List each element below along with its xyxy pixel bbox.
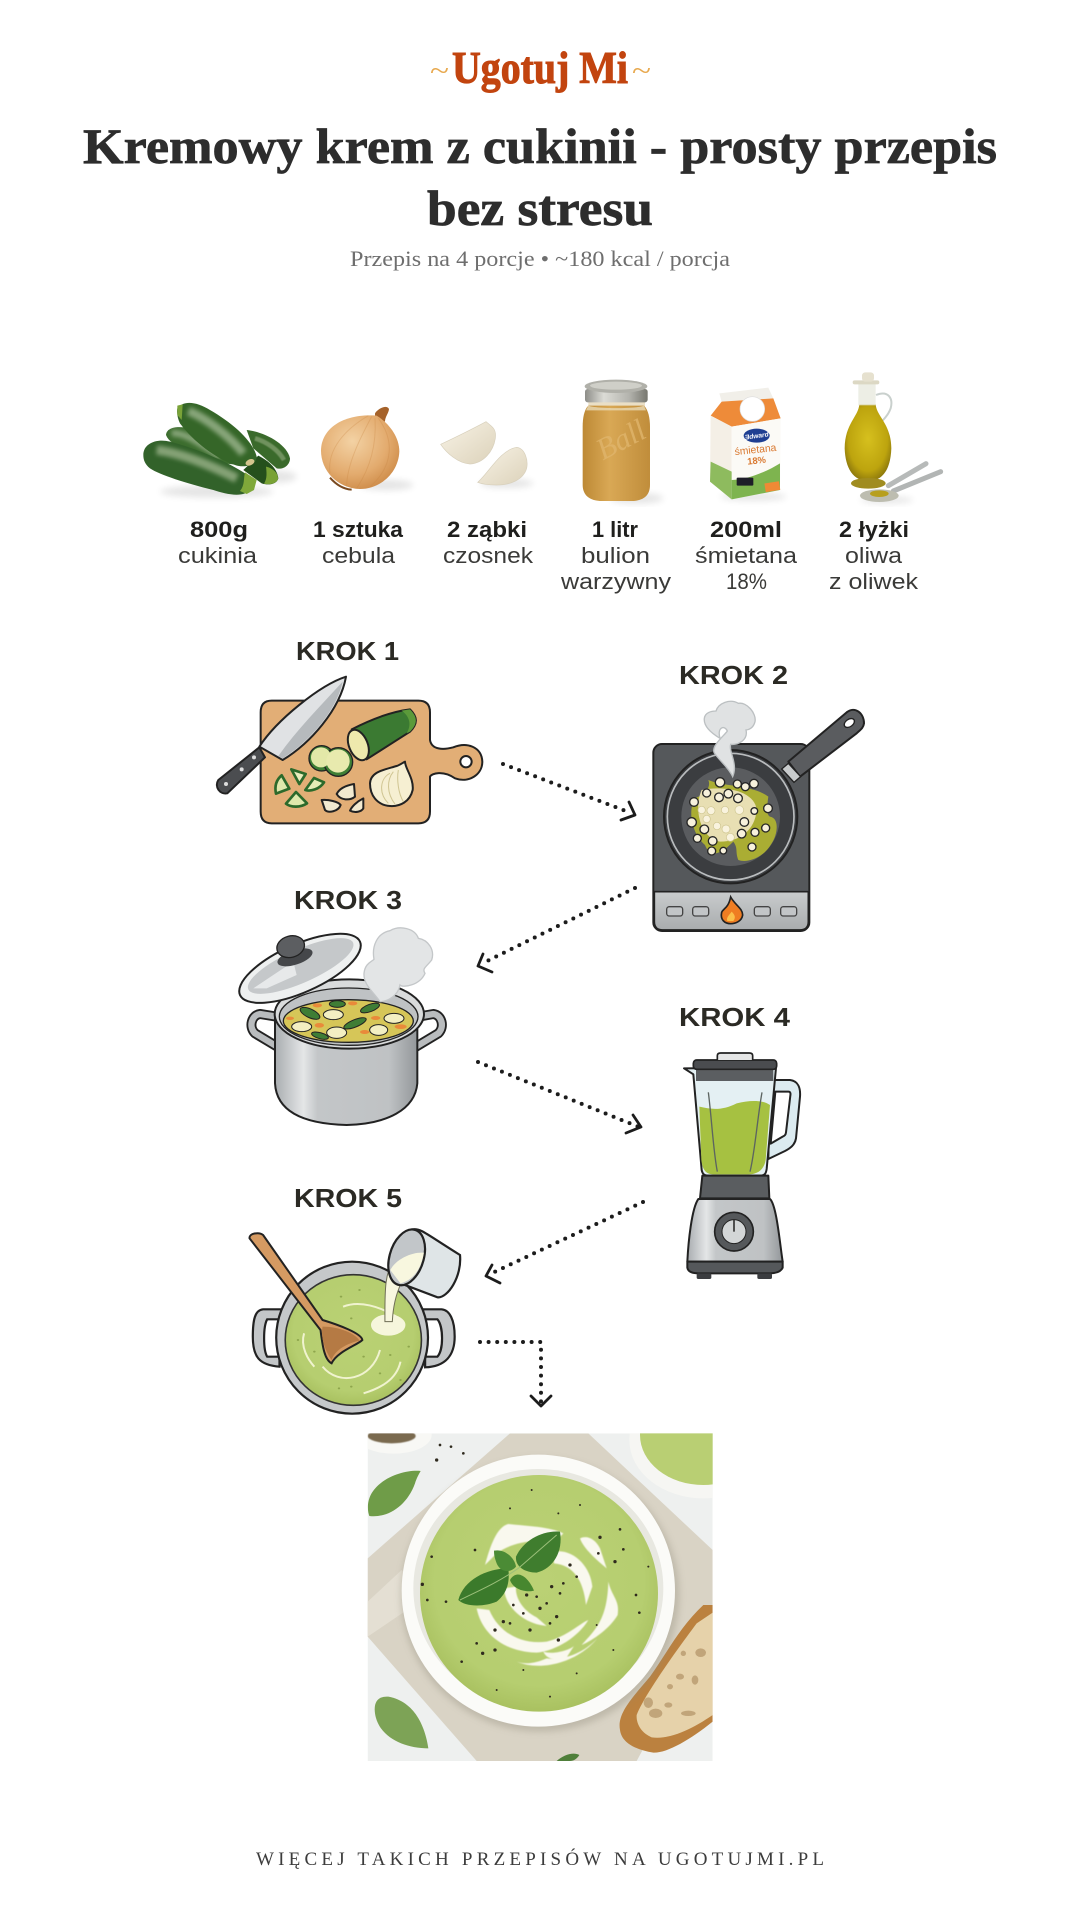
cream stream <box>385 1252 423 1322</box>
title line 1: Kremowy krem z cukinii - prosty przepis <box>83 118 997 174</box>
main bowl <box>402 1455 675 1727</box>
pot <box>276 1262 428 1414</box>
finished soup photo <box>368 1433 713 1761</box>
basil garnish <box>458 1531 561 1605</box>
logo right tilde: ~ <box>632 56 651 87</box>
arrow: step 2 to step 3 <box>478 888 635 972</box>
zucchini slices <box>275 746 353 807</box>
ingredients: jar, carton, oil <box>583 372 941 504</box>
label: broth <box>560 517 671 594</box>
label: zucchini <box>178 517 258 568</box>
knife <box>217 677 346 794</box>
label: olive oil: z oliwek <box>829 569 919 594</box>
label: olive oil <box>829 517 919 594</box>
soup <box>285 1275 421 1405</box>
logo wordmark: Ugotuj Mi <box>452 43 628 93</box>
pot handles <box>253 1309 455 1367</box>
table <box>368 1433 713 1761</box>
label: cream: śmietana <box>695 543 798 568</box>
jug handle <box>768 1080 800 1159</box>
stove <box>653 744 809 931</box>
icon: cream carton: śmietana <box>734 443 777 458</box>
label: zucchini: 800g <box>190 517 248 542</box>
label: broth: 1 litr <box>592 517 638 542</box>
logo <box>430 43 651 93</box>
label: cream: 200ml <box>710 517 782 542</box>
label: garlic: czosnek <box>443 543 534 568</box>
label: onion: cebula <box>322 543 396 568</box>
step 3 heading: KROK 3 <box>294 885 402 915</box>
label: olive oil: 2 łyżki <box>839 517 909 542</box>
pan <box>664 750 797 883</box>
second bowl <box>640 1433 713 1485</box>
jug lid <box>693 1053 777 1081</box>
label: onion: 1 sztuka <box>313 517 404 542</box>
step 4 heading: KROK 4 <box>679 1002 791 1032</box>
pot handles <box>251 1014 442 1048</box>
icon: cream carton: Ǝdward <box>744 431 770 442</box>
napkin <box>368 1433 713 1761</box>
arrow: step 1 to step 2 <box>503 764 635 820</box>
arrow: step 5 to finished dish <box>480 1342 551 1406</box>
bread slice <box>620 1605 713 1753</box>
step 2 icon: frying pan on stove <box>653 701 864 931</box>
cream swirls <box>303 1304 401 1393</box>
soup in blender <box>699 1101 770 1174</box>
label: broth: warzywny <box>560 569 671 594</box>
step 4 icon: blender <box>684 1053 800 1279</box>
step 5 heading: KROK 5 <box>294 1183 402 1213</box>
soup surface <box>420 1475 658 1712</box>
ingredient shadows <box>160 471 533 498</box>
arrow: step 3 to step 4 <box>478 1062 641 1133</box>
label: cream <box>695 517 798 594</box>
icon: cream carton <box>710 388 781 499</box>
footer: WIĘCEJ TAKICH PRZEPISÓW NA UGOTUJMI.PL <box>256 1848 824 1870</box>
icon: olive oil bottle with spoons <box>845 372 941 502</box>
icon: zucchini pile <box>143 403 290 495</box>
cutting board <box>261 701 482 823</box>
cream pool <box>371 1314 405 1336</box>
step 1 icon: chopping board <box>217 677 482 823</box>
blender neck <box>700 1176 769 1198</box>
soup flecks <box>297 1289 410 1389</box>
step 5 icon: pot with cream being poured <box>249 1227 460 1414</box>
flame <box>721 897 743 924</box>
pepper dish <box>368 1433 432 1454</box>
label: garlic: 2 ząbki <box>447 517 527 542</box>
step 2 heading: KROK 2 <box>679 660 788 690</box>
steam <box>364 928 433 1002</box>
jug blades lines <box>708 1092 762 1172</box>
label: zucchini: cukinia <box>178 543 258 568</box>
pan handle <box>782 710 864 782</box>
garlic pieces <box>322 784 363 812</box>
zucchini piece <box>344 709 416 763</box>
step 3 icon: simmering pot <box>230 920 442 1125</box>
stove buttons <box>667 907 797 916</box>
icon: cream carton: 18% <box>747 455 767 467</box>
title <box>83 118 997 236</box>
oil and onion <box>691 780 777 861</box>
cup <box>383 1227 460 1297</box>
label: garlic <box>443 517 534 568</box>
bottom basil leaf <box>375 1697 428 1748</box>
logo left tilde: ~ <box>430 56 449 87</box>
icon: broth jar <box>583 380 651 501</box>
icon: broth jar: Ball <box>590 413 651 467</box>
soft onion pieces <box>698 806 744 841</box>
label: broth: bulion <box>581 543 650 568</box>
blender base <box>687 1199 783 1279</box>
soup <box>283 1000 413 1042</box>
wooden spoon <box>249 1233 362 1363</box>
lid <box>230 920 370 1017</box>
left basil leaf <box>368 1471 421 1516</box>
pot body <box>275 1010 417 1125</box>
icon: onion <box>321 407 399 490</box>
label: onion <box>313 517 404 568</box>
title line 2: bez stresu <box>427 180 653 236</box>
bottom leaf fragment <box>557 1754 579 1761</box>
step 1 heading: KROK 1 <box>296 636 399 666</box>
pepper specks <box>421 1444 649 1698</box>
cream swirl <box>477 1524 618 1666</box>
label: olive oil: oliwa <box>845 543 903 568</box>
label: cream: 18% <box>726 569 767 594</box>
blender dial <box>715 1212 753 1251</box>
ingredient labels <box>178 517 919 594</box>
main bowl shadow <box>401 1458 679 1732</box>
icon: garlic cloves <box>441 422 527 485</box>
onion pieces <box>687 778 772 855</box>
pot rim <box>275 979 424 1049</box>
jug <box>684 1068 776 1176</box>
steam <box>704 701 755 777</box>
ingredients: zucchini, onion, garlic <box>143 403 533 498</box>
arrow: step 4 to step 5 <box>486 1202 643 1283</box>
ingredient shadows <box>610 493 913 504</box>
onion half <box>370 762 413 806</box>
subtitle: Przepis na 4 porcje • ~180 kcal / porcja <box>350 246 730 271</box>
